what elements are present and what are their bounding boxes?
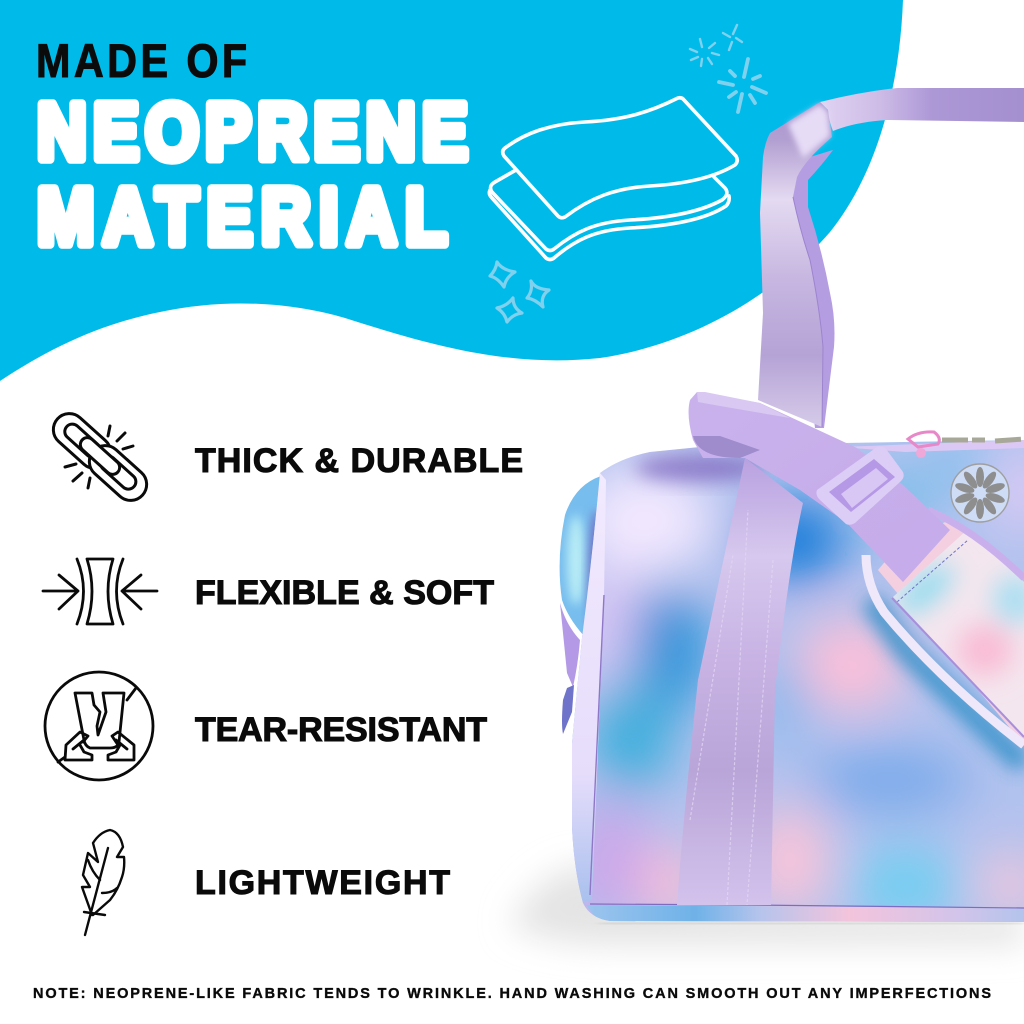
bag ground shadow (510, 865, 1024, 945)
buckle (816, 446, 904, 525)
side tab (560, 603, 580, 687)
adjuster strap (689, 392, 950, 582)
side panel (572, 473, 606, 903)
background blue wave panel (0, 0, 903, 381)
bag body (565, 430, 1024, 930)
title line: material: MATERIAL (37, 171, 447, 261)
logo badge (951, 464, 1009, 522)
icon: broken chain link (47, 407, 153, 507)
label: FLEXIBLE & SOFT (195, 574, 494, 612)
icon: feather (82, 830, 124, 935)
pocket (878, 520, 1024, 745)
zipper and pull cord (908, 432, 1024, 458)
shadow under pocket piping (870, 600, 1024, 765)
handle back strap (785, 150, 834, 428)
feature: lightweight (82, 830, 450, 935)
label: LIGHTWEIGHT (195, 864, 450, 902)
title line: made of: MADE OF (36, 36, 247, 88)
rear side ear panel (560, 476, 601, 636)
top rim (840, 440, 1024, 452)
front drop (758, 102, 832, 427)
feature: tear resistant (45, 672, 487, 780)
front webbing handle (677, 458, 803, 905)
icon: diamond sparkles (490, 262, 549, 322)
icon: compression (43, 559, 157, 624)
label: THICK & DURABLE (195, 442, 523, 480)
icon: neoprene sheets (489, 98, 737, 260)
base strip (586, 905, 1024, 923)
title line: neoprene: NEOPRENE (37, 86, 468, 176)
top handle strap (758, 88, 1024, 427)
icon: tear prohibited (45, 672, 153, 780)
feature: thick and durable (47, 407, 523, 507)
feature: flexible and soft (43, 559, 494, 624)
bag photo illustration (510, 88, 1024, 945)
pocket piping (866, 555, 1024, 745)
shadow under strap (635, 454, 765, 482)
icon: burst sparkles (690, 25, 766, 112)
footnote: NOTE: NEOPRENE-LIKE FABRIC TENDS TO WRINKLE. HAND WASHING CAN SMOOTH OUT ANY IMPERFECTIONS (33, 986, 991, 1002)
horizontal band (820, 88, 1024, 131)
title (36, 36, 468, 261)
label: TEAR-RESISTANT (195, 711, 487, 749)
